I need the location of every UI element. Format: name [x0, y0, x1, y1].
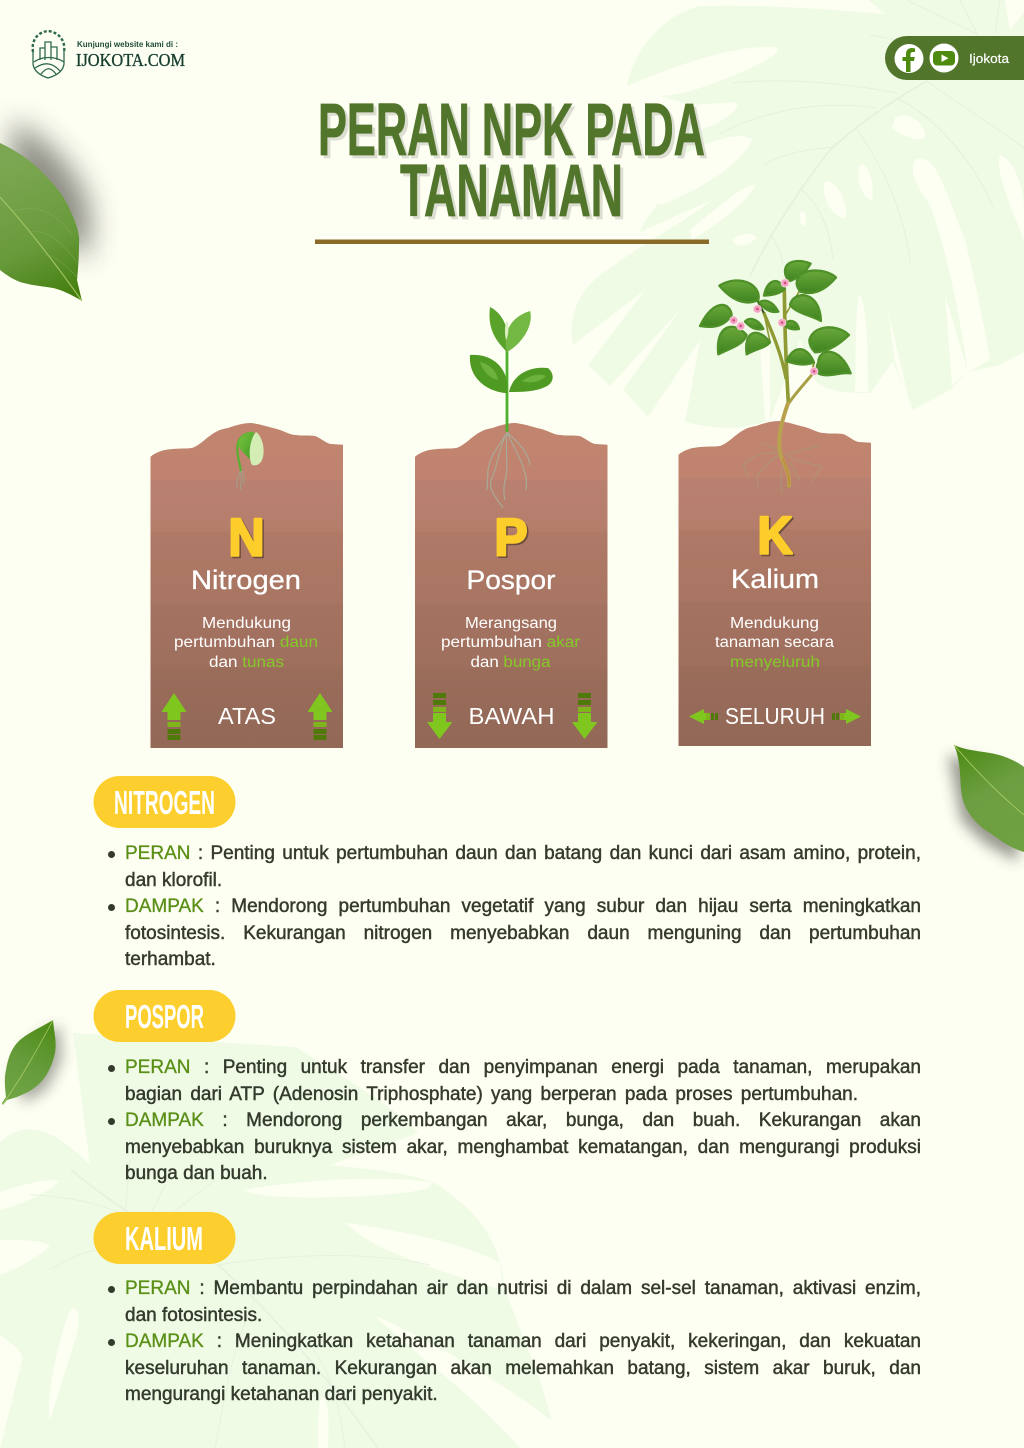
background monstera leaf bottom left	[0, 1033, 560, 1448]
card description: Nitrogen	[174, 615, 318, 671]
text block: Pospor details	[108, 1056, 921, 1184]
card description: Pospor: dan bunga	[470, 654, 551, 671]
letter K: K	[759, 508, 794, 567]
logo: Ijokota emblem	[33, 31, 64, 78]
section pill: Nitrogen: NITROGEN	[114, 784, 215, 821]
section pill: Pospor: POSPOR	[125, 998, 204, 1035]
text block: Nitrogen details: terhambat.	[125, 948, 216, 970]
panel: Nitrogen card	[150, 423, 343, 748]
card description: Pospor: pertumbuhan akar	[441, 634, 580, 651]
title: PERAN NPK PADA	[318, 88, 705, 171]
section pill: Kalium	[94, 1212, 236, 1264]
text block: Pospor details: bagian dari ATP (Adenosin Triphosphate) yang berperan pada proses pertumbuhan.	[125, 1084, 858, 1104]
card description: Nitrogen: dan tunas	[209, 654, 284, 671]
icon: young plant with roots	[470, 307, 553, 508]
text block: Nitrogen details: fotosintesis. Kekurangan nitrogen menyebabkan daun menguning dan pertumbuhan	[125, 922, 921, 944]
title: TANAMAN	[400, 149, 623, 232]
text block: Pospor details: DAMPAK : Mendorong perkembangan akar, bunga, dan buah. Kekurangan akan	[125, 1110, 921, 1130]
arrow up left	[162, 693, 186, 740]
text block: Kalium details: DAMPAK : Meningkatkan ketahanan tanaman dari penyakit, kekeringan, dan kekuatan	[125, 1330, 921, 1352]
arrow down right	[572, 693, 598, 739]
text block: Nitrogen details: DAMPAK : Mendorong pertumbuhan vegetatif yang subur dan hijau serta meningkatkan	[125, 896, 921, 916]
social media pill	[885, 36, 1024, 80]
letter N: N	[228, 508, 264, 568]
logo text: website invitation: Kunjungi website kami di :	[77, 40, 178, 49]
card description: Kalium	[715, 615, 834, 671]
card description: Nitrogen: Mendukung	[202, 615, 291, 632]
text block: Pospor details: menyebabkan buruknya sistem akar, menghambat kematangan, dan mengurangi produksi	[125, 1136, 921, 1158]
text block: Kalium details: keseluruhan tanaman. Kekurangan akan melemahkan batang, sistem akar buruk, dan	[125, 1358, 921, 1378]
text block: Nitrogen details: dan klorofil.	[125, 870, 222, 890]
card description: Pospor: Merangsang	[465, 615, 557, 632]
card name: Nitrogen: Nitrogen	[191, 565, 301, 595]
section pill: Nitrogen	[94, 776, 236, 828]
card name: Kalium: Kalium	[731, 564, 819, 594]
panel: Pospor card	[415, 307, 608, 748]
arrow up right	[308, 693, 332, 740]
decorative leaf right	[948, 745, 1024, 862]
icon: youtube	[930, 44, 958, 72]
card description: Kalium: Mendukung	[730, 615, 819, 632]
label: BAWAH: BAWAH	[468, 703, 554, 729]
background monstera leaf top right	[572, 0, 1024, 428]
text block: Kalium details: mengurangi ketahanan dari penyakit.	[125, 1384, 438, 1404]
card description: Kalium: tanaman secara	[715, 634, 834, 651]
letter P: P	[496, 510, 529, 569]
text block: Kalium details: PERAN : Membantu perpindahan air dan nutrisi di dalam sel-sel tanaman, aktivasi enzim,	[125, 1278, 921, 1298]
icon: germinating seed	[237, 432, 264, 490]
card name: Pospor: Pospor	[466, 565, 556, 595]
section pill: Pospor	[94, 990, 236, 1042]
card description: Pospor	[441, 615, 580, 671]
text block: Pospor details: bunga dan buah.	[125, 1162, 268, 1184]
title: PERAN NPK PADA	[321, 91, 708, 174]
icon: facebook	[894, 44, 924, 73]
letter P: P	[494, 508, 528, 568]
arrow down left	[427, 693, 452, 739]
arrow left	[689, 709, 718, 724]
icon: flowering plant with roots	[700, 261, 851, 493]
label: ATAS: ATAS	[218, 703, 276, 729]
logo text: Ijokota.com: IJOKOTA.COM	[76, 50, 185, 70]
card description: Kalium: menyeluruh	[730, 654, 820, 671]
letter K: K	[758, 506, 792, 566]
title: TANAMAN	[403, 152, 626, 235]
text block: Kalium details	[108, 1278, 921, 1404]
decorative leaf top left	[0, 121, 91, 301]
section pill: Kalium: KALIUM	[125, 1220, 203, 1257]
social handle: Ijokota	[969, 51, 1010, 66]
label: SELURUH: SELURUH	[725, 703, 825, 729]
title	[318, 88, 708, 235]
card description: Nitrogen: pertumbuhan daun	[174, 634, 318, 651]
text block: Nitrogen details	[108, 842, 921, 970]
text block: Pospor details: PERAN : Penting untuk transfer dan penyimpanan energi pada tanaman, merupakan	[125, 1056, 921, 1078]
panel: Kalium card	[678, 261, 871, 746]
decorative leaf lower left	[2, 1020, 62, 1105]
letter N: N	[230, 510, 266, 569]
text block: Kalium details: dan fotosintesis.	[125, 1304, 262, 1326]
text block: Nitrogen details: PERAN : Penting untuk pertumbuhan daun dan batang dan kunci dari asam amino, protein,	[125, 842, 921, 864]
arrow right	[832, 709, 861, 724]
